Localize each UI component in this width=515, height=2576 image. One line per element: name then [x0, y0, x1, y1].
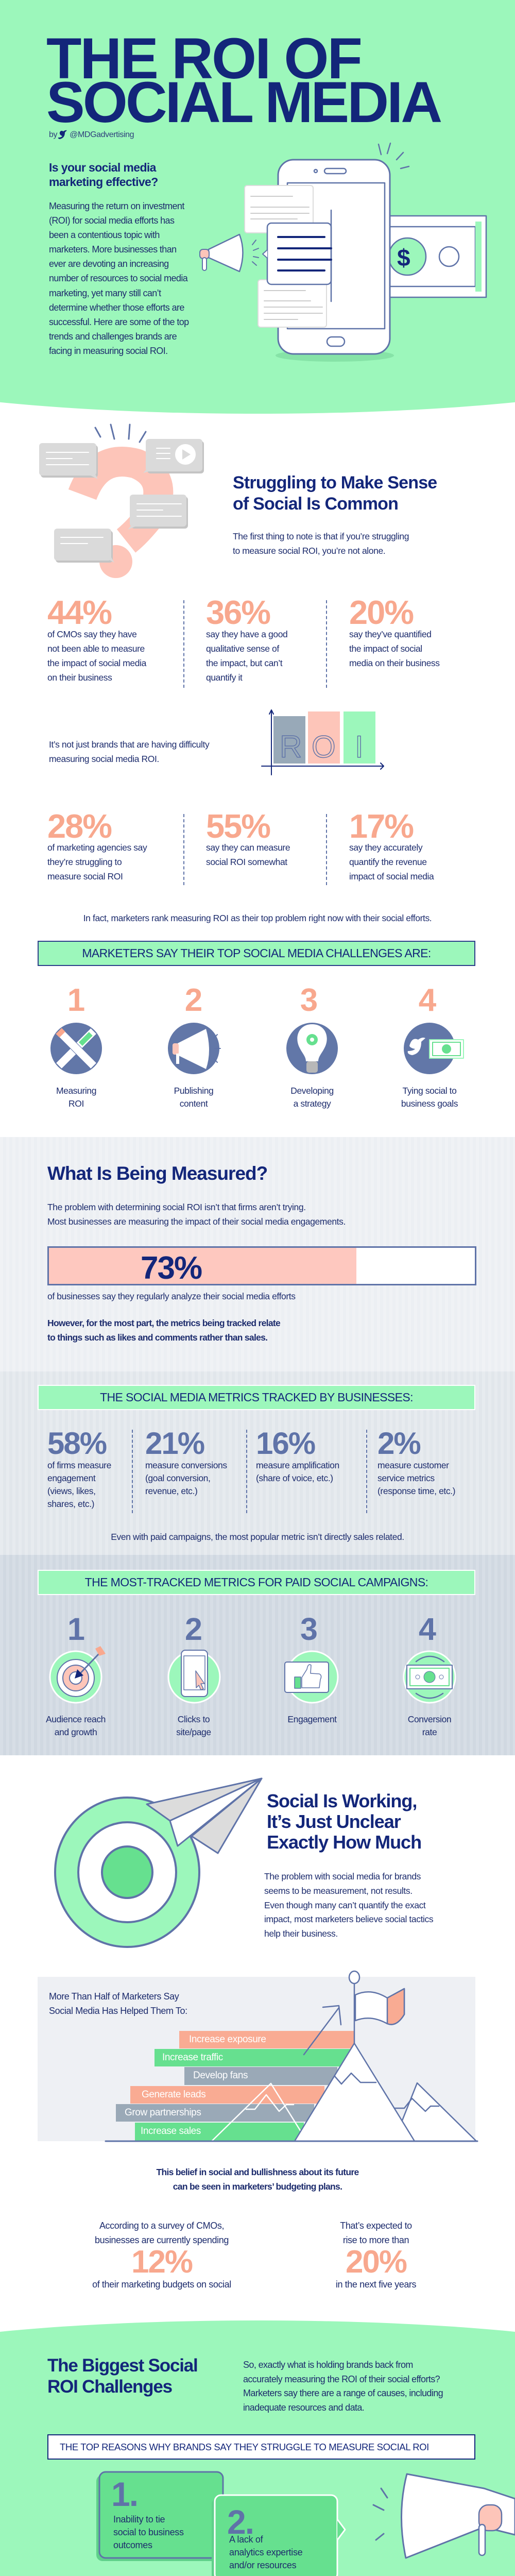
stats row 2: they’re struggling to [47, 857, 122, 867]
stats row 1: the impact, but can’t [206, 658, 282, 668]
metrics stats: of firms measure [47, 1460, 111, 1470]
metrics stats [47, 1426, 455, 1513]
banner: top reasons: THE TOP REASONS WHY BRANDS SAY THEY STRUGGLE TO MEASURE SOCIAL ROI [60, 2442, 429, 2452]
box texts: 1. [111, 2475, 138, 2513]
metrics stats: engagement [47, 1473, 95, 1483]
chart labels: Grow partnerships [125, 2107, 201, 2118]
intro text: ever are devoting an increasing [49, 259, 169, 269]
bold text likes [47, 1318, 280, 1343]
challenges text: So, exactly what is holding brands back from [243, 2360, 413, 2370]
measured text [47, 1202, 346, 1227]
heading: struggling: of Social Is Common [233, 494, 398, 514]
top challenges numbers and labels: 4 [419, 982, 436, 1018]
chart title [49, 1991, 187, 2016]
banner: top reasons [47, 2434, 475, 2460]
intro heading [49, 161, 158, 189]
paid numbers and labels [46, 1612, 451, 1737]
stats row 2: 55% [206, 807, 270, 845]
icons: paid metrics [50, 1646, 455, 1703]
icons: top challenges [50, 1023, 464, 1074]
intro heading: Is your social media [49, 161, 156, 174]
paid numbers and labels: site/page [176, 1727, 211, 1737]
paid numbers and labels: Clicks to [178, 1714, 210, 1724]
metrics stats: (goal conversion, [145, 1473, 210, 1483]
stats row 2: impact of social media [349, 871, 434, 882]
metrics stats: 58% [47, 1426, 106, 1461]
budget stat 20%: rise to more than [343, 2235, 409, 2245]
roi text [49, 739, 210, 764]
intro text: determine whether those efforts are [49, 302, 184, 313]
stats row 1: the impact of social [349, 643, 422, 654]
budget bold text: can be seen in marketers’ budgeting plans. [173, 2181, 342, 2192]
stats row 1 [47, 594, 440, 688]
top challenges numbers and labels: Developing [290, 1086, 334, 1096]
paid numbers and labels: 4 [419, 1612, 436, 1647]
top challenges numbers and labels: business goals [401, 1098, 458, 1109]
stats row 1: the impact of social media [47, 658, 146, 668]
paid numbers and labels: Conversion [408, 1714, 451, 1724]
intro text: (ROI) for social media efforts has [49, 215, 174, 226]
illustration: phone with chat bubbles and money [200, 143, 486, 362]
top challenges numbers and labels: Tying social to [403, 1086, 456, 1096]
social working text: The problem with social media for brands [264, 1871, 421, 1882]
top challenges numbers and labels: 3 [300, 982, 318, 1018]
box texts [111, 2475, 302, 2570]
banner: top challenges: MARKETERS SAY THEIR TOP SOCIAL MEDIA CHALLENGES ARE: [82, 946, 431, 960]
heading: biggest challenges: The Biggest Social [47, 2355, 198, 2376]
stats row 2: 17% [349, 807, 413, 845]
budget stat 12%: of their marketing budgets on social [92, 2279, 231, 2290]
metrics stats: (share of voice, etc.) [256, 1473, 333, 1483]
box texts: A lack of [229, 2534, 263, 2545]
intro text [49, 201, 189, 356]
top challenges numbers and labels [56, 982, 458, 1109]
metrics stats: service metrics [377, 1473, 435, 1483]
chart labels [125, 2034, 266, 2137]
stats row 1: say they’ve quantified [349, 629, 432, 639]
social working text: help their business. [264, 1928, 338, 1939]
intro text: successful. Here are some of the top [49, 317, 189, 327]
progress bar 73%: 73% [141, 1250, 201, 1286]
metrics stats: 21% [145, 1426, 204, 1461]
roi text: It’s not just brands that are having difficulty [49, 739, 209, 750]
stats row 1: on their business [47, 672, 112, 683]
illustration: phone with chat bubbles and money: $ [397, 244, 410, 271]
banner: top challenges [38, 941, 475, 966]
stats row 2: of marketing agencies say [47, 842, 147, 853]
stats row 2: measure social ROI [47, 871, 123, 882]
top challenges numbers and labels: 1 [67, 982, 85, 1018]
stats row 2: 28% [47, 807, 111, 845]
stats row 1: of CMOs say they have [47, 629, 136, 639]
illustration: target and paper plane [55, 1778, 262, 1947]
box texts: social to business [113, 2527, 184, 2537]
social working text: impact, most marketers believe social tactics [264, 1914, 433, 1924]
chart: ROI bars: I [355, 730, 364, 764]
metrics stats: measure conversions [145, 1460, 227, 1470]
budget stat 20%: 20% [346, 2244, 406, 2280]
top challenges numbers and labels: Publishing [174, 1086, 213, 1096]
box 2 [212, 2495, 345, 2576]
icon: twitter bird byline [58, 130, 67, 139]
heading: what is measured: What Is Being Measured? [47, 1163, 267, 1184]
paid numbers and labels: 1 [67, 1612, 85, 1647]
metrics stats: 2% [377, 1426, 420, 1461]
stats row 1: not been able to measure [47, 643, 145, 654]
chart labels: Increase exposure [189, 2034, 266, 2045]
stats row 2 [47, 807, 434, 885]
intro text: number of resources to social media [49, 273, 187, 283]
paid text: Even with paid campaigns, the most popular metric isn’t directly sales related. [111, 1532, 404, 1542]
top challenges numbers and labels: 2 [185, 982, 202, 1018]
top challenges numbers and labels: Measuring [56, 1086, 96, 1096]
illustration: megaphone [373, 2474, 515, 2558]
stats row 1: 36% [206, 594, 270, 631]
chart: ROI bars [262, 710, 384, 775]
heading: biggest challenges [47, 2355, 198, 2397]
background: metrics section [0, 1371, 515, 1555]
box 1 [96, 2472, 223, 2561]
intro text: facing in measuring social ROI. [49, 346, 168, 356]
budget stat 12%: businesses are currently spending [95, 2235, 229, 2245]
intro text: marketers. More businesses than [49, 244, 177, 255]
paid numbers and labels: and growth [55, 1727, 97, 1737]
box texts: Inability to tie [113, 2514, 165, 2524]
stats row 1: 44% [47, 594, 111, 631]
challenges text: Marketers say there are a range of causes, including [243, 2388, 443, 2398]
intro heading: marketing effective? [49, 175, 158, 189]
chart labels: Develop fans [193, 2070, 248, 2081]
paid numbers and labels: Engagement [287, 1714, 337, 1724]
title: THE ROI OF [46, 26, 361, 91]
title [46, 26, 441, 134]
roi text: measuring social media ROI. [49, 754, 159, 764]
heading: social is working: It’s Just Unclear [267, 1811, 401, 1832]
budget bold text: This belief in social and bullishness about its future [157, 2167, 358, 2177]
heading: social is working: Social Is Working, [267, 1790, 417, 1811]
intro text: marketing, yet many still can’t [49, 288, 161, 298]
paid numbers and labels: 2 [185, 1612, 202, 1647]
social working text: Even though many can’t quantify the exact [264, 1900, 425, 1910]
banner: paid metrics [38, 1570, 475, 1595]
intro text: Measuring the return on investment [49, 201, 184, 211]
measured text: Most businesses are measuring the impact of their social media engagements. [47, 1216, 346, 1227]
metrics stats: (views, likes, [47, 1486, 96, 1496]
top challenges numbers and labels: ROI [68, 1098, 84, 1109]
heading: social is working: Exactly How Much [267, 1832, 421, 1853]
budget stat 12% [92, 2221, 231, 2290]
struggling text: The first thing to note is that if you’re struggling [233, 531, 409, 541]
paid numbers and labels: 3 [300, 1612, 318, 1647]
box texts: analytics expertise [229, 2547, 302, 2557]
in fact text: In fact, marketers rank measuring ROI as their top problem right now with their social efforts. [83, 913, 432, 923]
background: chart panel [38, 1977, 475, 2141]
banner: paid metrics: THE MOST-TRACKED METRICS FOR PAID SOCIAL CAMPAIGNS: [85, 1575, 428, 1589]
chart labels: Increase traffic [162, 2052, 223, 2063]
stats row 1: media on their business [349, 658, 440, 668]
paid numbers and labels: rate [422, 1727, 437, 1737]
stats row 1: qualitative sense of [206, 643, 279, 654]
chart: ROI bars: R [280, 730, 302, 764]
progress bar 73% [47, 1246, 476, 1285]
bold text likes: to things such as likes and comments rather than sales. [47, 1332, 267, 1343]
stats row 1: 20% [349, 594, 413, 631]
budget bold text [157, 2167, 359, 2192]
box texts: outcomes [113, 2540, 152, 2550]
paid numbers and labels: Audience reach [46, 1714, 106, 1724]
intro text: trends and challenges brands are [49, 331, 177, 342]
metrics stats: measure amplification [256, 1460, 339, 1470]
chart labels: Generate leads [142, 2089, 205, 2100]
stats row 2: say they accurately [349, 842, 422, 853]
metrics stats: shares, etc.) [47, 1499, 94, 1509]
byline: by @MDGadvertising [49, 130, 134, 139]
banner: metrics tracked [38, 1385, 475, 1410]
budget stat 20%: in the next five years [336, 2279, 416, 2290]
metrics stats: measure customer [377, 1460, 449, 1470]
caption 73: of businesses say they regularly analyze their social media efforts [47, 1291, 296, 1301]
measured text: The problem with determining social ROI isn’t that firms aren’t trying. [47, 1202, 306, 1212]
social working text [264, 1871, 433, 1939]
chart title: Social Media Has Helped Them To: [49, 2006, 187, 2016]
banner: metrics tracked: THE SOCIAL MEDIA METRICS TRACKED BY BUSINESSES: [100, 1391, 413, 1404]
chart: bars and mountain [106, 1971, 477, 2141]
stats row 1: say they have a good [206, 629, 287, 639]
heading: struggling: Struggling to Make Sense [233, 473, 437, 493]
intro text: been a contentious topic with [49, 230, 160, 240]
top challenges numbers and labels: content [180, 1098, 208, 1109]
box texts: 2. [227, 2503, 253, 2541]
budget stat 20% [336, 2221, 416, 2290]
top challenges numbers and labels: a strategy [294, 1098, 331, 1109]
chart: ROI bars: O [312, 730, 336, 764]
background: gray measured section [0, 1137, 515, 1371]
title: SOCIAL MEDIA [46, 70, 440, 134]
stats row 1: quantify it [206, 672, 243, 683]
challenges text: inadequate resources and data. [243, 2402, 364, 2413]
metrics stats: (response time, etc.) [377, 1486, 455, 1496]
chart title: More Than Half of Marketers Say [49, 1991, 179, 2002]
social working text: seems to be measurement, not results. [264, 1886, 413, 1896]
heading: struggling [233, 473, 437, 514]
chart labels: Increase sales [141, 2126, 201, 2137]
challenges text [243, 2360, 443, 2413]
budget stat 12%: According to a survey of CMOs, [99, 2221, 224, 2231]
budget stat 12%: 12% [131, 2244, 192, 2280]
heading: biggest challenges: ROI Challenges [47, 2377, 172, 2397]
background: paid section [0, 1555, 515, 1755]
challenges text: accurately measuring the ROI of their social efforts? [243, 2374, 440, 2384]
box texts: and/or resources [229, 2560, 296, 2570]
stats row 2: social ROI somewhat [206, 857, 287, 867]
stats row 2: say they can measure [206, 842, 290, 853]
illustration: question mark with chat bubbles [39, 425, 204, 578]
struggling text [233, 531, 409, 556]
background: green header [0, 0, 515, 361]
metrics stats: 16% [256, 1426, 315, 1461]
budget stat 20%: That’s expected to [340, 2221, 412, 2231]
background: challenges green [0, 2320, 515, 2424]
stats row 2: quantify the revenue [349, 857, 427, 867]
metrics stats: revenue, etc.) [145, 1486, 197, 1496]
heading: social is working [267, 1790, 421, 1853]
struggling text: to measure social ROI, you’re not alone. [233, 546, 385, 556]
bold text likes: However, for the most part, the metrics being tracked relate [47, 1318, 280, 1328]
